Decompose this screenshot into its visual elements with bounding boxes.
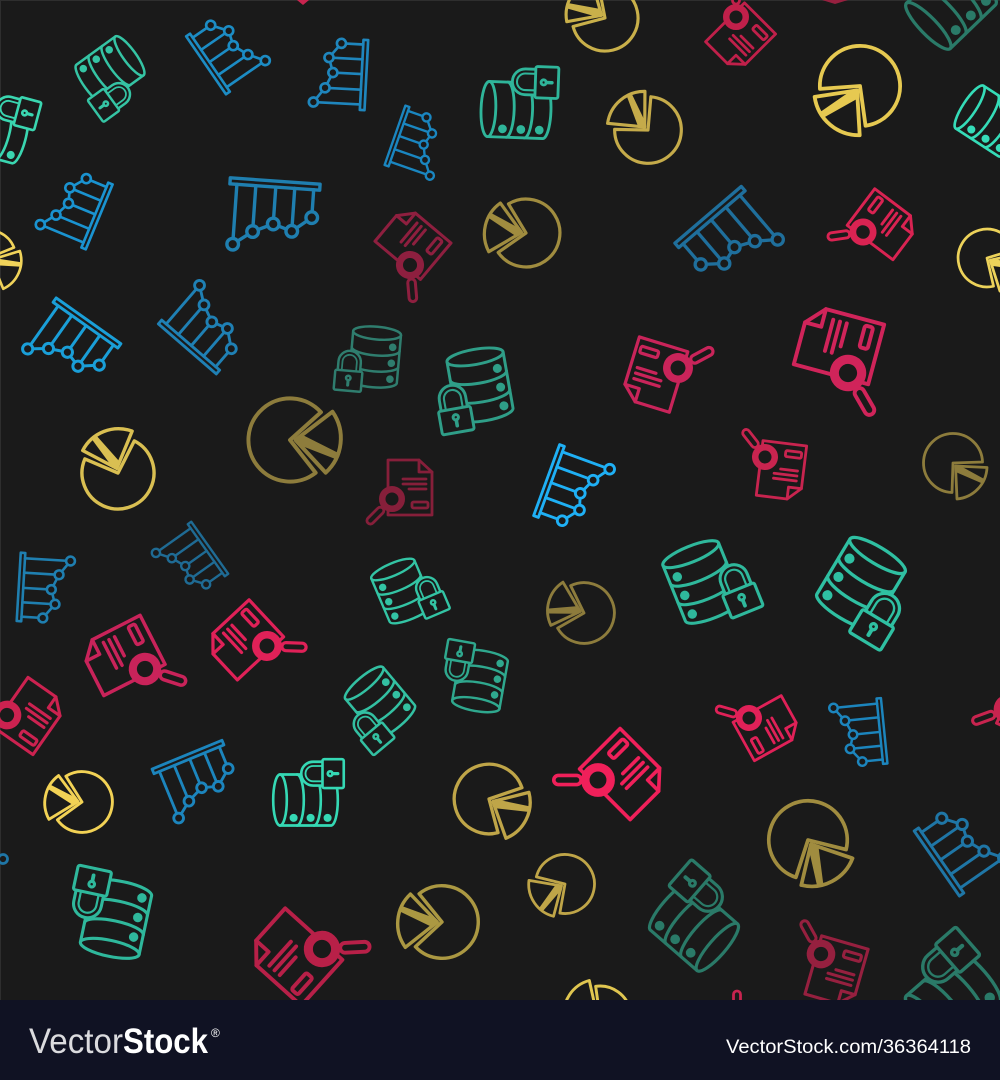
image id text: VectorStock.com/36364118 xyxy=(726,1037,971,1058)
icon: database with lock xyxy=(887,927,1000,1051)
icon: newton cradle xyxy=(158,278,256,374)
logo: VectorStock: VectorStock xyxy=(29,1022,208,1061)
icon: newton cradle xyxy=(385,106,453,182)
icon: pie chart xyxy=(536,566,625,656)
icon: database with lock xyxy=(950,69,1000,163)
icon: document with magnifier xyxy=(359,205,460,305)
icon: pie chart xyxy=(32,756,124,848)
icon: document with magnifier xyxy=(203,592,310,699)
icon: database with lock xyxy=(273,759,344,826)
icon: pie chart xyxy=(810,42,905,140)
icon: document with magnifier xyxy=(365,460,432,526)
icon: database with lock xyxy=(0,84,42,167)
icon: pie chart xyxy=(446,754,540,850)
icon: database with lock xyxy=(61,865,155,962)
icon: document with magnifier xyxy=(781,918,871,1007)
icon: pie chart xyxy=(606,90,683,165)
icon: pie chart xyxy=(470,182,573,284)
icon: document with magnifier xyxy=(713,676,803,766)
icon: newton cradle xyxy=(17,553,75,624)
icon: pie chart xyxy=(558,974,636,1054)
icon: newton cradle xyxy=(675,186,787,296)
icon: document with magnifier xyxy=(244,885,374,1015)
icon: database with lock xyxy=(369,549,450,632)
icon: document with magnifier xyxy=(690,988,783,1080)
icon: document with magnifier xyxy=(786,305,898,418)
icon: newton cradle xyxy=(829,698,887,769)
icon: database with lock xyxy=(437,639,510,715)
icon: document fragment xyxy=(297,0,309,5)
icon: pie chart xyxy=(381,867,493,978)
icon: database with lock xyxy=(660,529,763,635)
icon: newton cradle xyxy=(186,5,272,94)
icon: newton cradle xyxy=(20,298,121,395)
icon: database with lock xyxy=(334,323,402,395)
icon: newton cradle xyxy=(152,740,245,825)
icon: pie chart xyxy=(952,221,1000,300)
icon: pie chart xyxy=(559,0,645,59)
icon: newton cradle xyxy=(309,37,368,110)
icon: cradle ball fragment xyxy=(0,854,8,864)
icon: database with lock xyxy=(67,33,157,122)
registered mark: ® xyxy=(211,1026,220,1040)
icon: document with magnifier xyxy=(0,663,68,764)
icon: newton cradle xyxy=(914,795,1000,896)
icon: database with lock xyxy=(480,65,559,139)
icon: database with lock xyxy=(429,344,515,435)
icon: database with lock xyxy=(887,0,1000,54)
icon: document with magnifier xyxy=(824,182,920,278)
icon: pie chart xyxy=(0,221,30,300)
icon: pie chart xyxy=(231,376,360,503)
icon: document with magnifier xyxy=(734,427,808,501)
icon: document with magnifier xyxy=(969,658,1000,754)
footer bar xyxy=(0,1000,1000,1080)
icon: pie chart xyxy=(924,434,987,499)
icon: newton cradle xyxy=(225,178,320,256)
icon: newton cradle xyxy=(534,445,616,536)
icon: newton cradle xyxy=(34,163,113,249)
icon: document fragment xyxy=(822,0,848,4)
icon: document with magnifier xyxy=(621,325,716,420)
icon: document with magnifier xyxy=(549,719,671,840)
icon: pie chart xyxy=(65,416,169,521)
icon: database with lock xyxy=(330,662,423,756)
icon: database with lock xyxy=(809,532,926,651)
icon: pie chart xyxy=(758,791,865,897)
icon: pie chart xyxy=(523,848,600,923)
icon: document with magnifier xyxy=(690,0,783,73)
icon: newton cradle xyxy=(150,522,228,603)
icon: document with magnifier xyxy=(79,609,190,721)
icon: database with lock xyxy=(639,859,756,976)
